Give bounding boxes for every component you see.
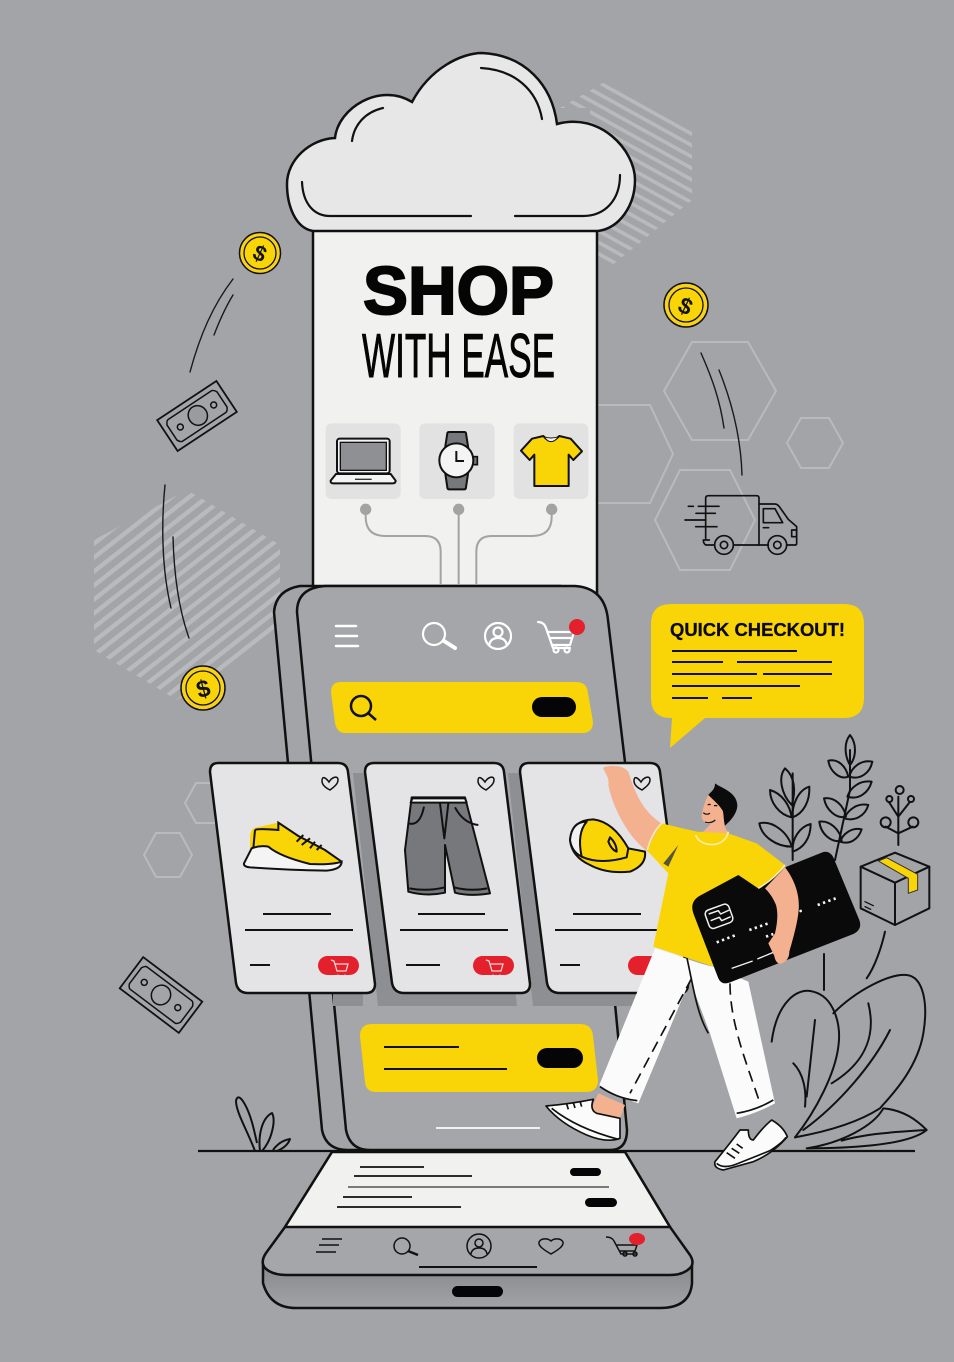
cloud (287, 53, 635, 231)
forearm and hand (765, 867, 799, 964)
icon: cart white (538, 622, 574, 652)
phone top surface (263, 1152, 692, 1275)
coin top left: $ (249, 240, 271, 267)
plant one (759, 768, 811, 860)
plant two (819, 735, 872, 860)
credit card (692, 852, 860, 983)
connector lines (361, 505, 556, 584)
tile: watch (419, 423, 495, 499)
raised arm (603, 766, 662, 853)
parcel box (861, 853, 929, 925)
rear ankle (590, 1093, 625, 1118)
phone base (263, 1262, 692, 1308)
home indicator (436, 1127, 540, 1129)
coin left (181, 666, 225, 710)
product card: sneaker (210, 763, 375, 993)
face details (703, 804, 717, 823)
icon: delivery truck (685, 496, 797, 554)
icon: search white (423, 623, 455, 648)
outline hexagons (144, 342, 843, 877)
shirt underarm shade (663, 845, 678, 867)
product card: cap (520, 763, 688, 993)
heading: with ease: WITH EASE (362, 322, 555, 391)
striped hexagon left (94, 490, 280, 700)
search bar (331, 682, 593, 733)
yellow shirt (647, 823, 785, 967)
neck and face (700, 795, 728, 842)
coin top right: $ (674, 291, 697, 320)
icon: menu (336, 626, 358, 646)
phone screen (285, 1152, 670, 1227)
shirt trims (647, 823, 728, 850)
product card: shorts (365, 763, 530, 993)
coin top right (664, 283, 708, 327)
front shoe (715, 1120, 787, 1170)
right foliage and parcel (759, 735, 929, 1148)
berry sprig (881, 786, 918, 845)
striped hexagon top right (560, 80, 692, 267)
lower yellow panel (360, 1024, 598, 1092)
hair (708, 783, 737, 826)
bottom nav icons (316, 1234, 637, 1258)
trouser details (600, 957, 773, 1113)
speech bubble: quick checkout (651, 604, 864, 748)
white trousers (599, 948, 775, 1118)
bottom phone (263, 1152, 692, 1308)
coin left: $ (193, 675, 214, 704)
sleeve trim (758, 865, 785, 888)
card shadows (333, 773, 670, 1006)
notification dot (569, 619, 585, 635)
title panel column (287, 53, 635, 595)
ground line (198, 1150, 915, 1152)
phone front layer (297, 586, 627, 1150)
small grass plant (236, 1097, 290, 1151)
icon: banknote top (157, 381, 237, 451)
tile: laptop (326, 423, 401, 499)
tile: t-shirt (514, 423, 588, 499)
large leaves (772, 932, 927, 1148)
bubble heading: QUICK CHECKOUT! (670, 619, 845, 640)
coin top left (240, 232, 280, 274)
rear shoe (546, 1099, 620, 1140)
person with credit card (546, 766, 860, 1170)
icon: profile white (485, 623, 511, 649)
bottom notification dot (629, 1233, 645, 1245)
icon: banknote bottom (120, 957, 202, 1033)
main phone (210, 586, 688, 1150)
heading: shop: SHOP (363, 253, 554, 329)
category tiles (326, 423, 588, 584)
phone back layer (274, 586, 560, 1150)
sleeve over card (740, 845, 785, 888)
motion swooshes (163, 279, 742, 638)
